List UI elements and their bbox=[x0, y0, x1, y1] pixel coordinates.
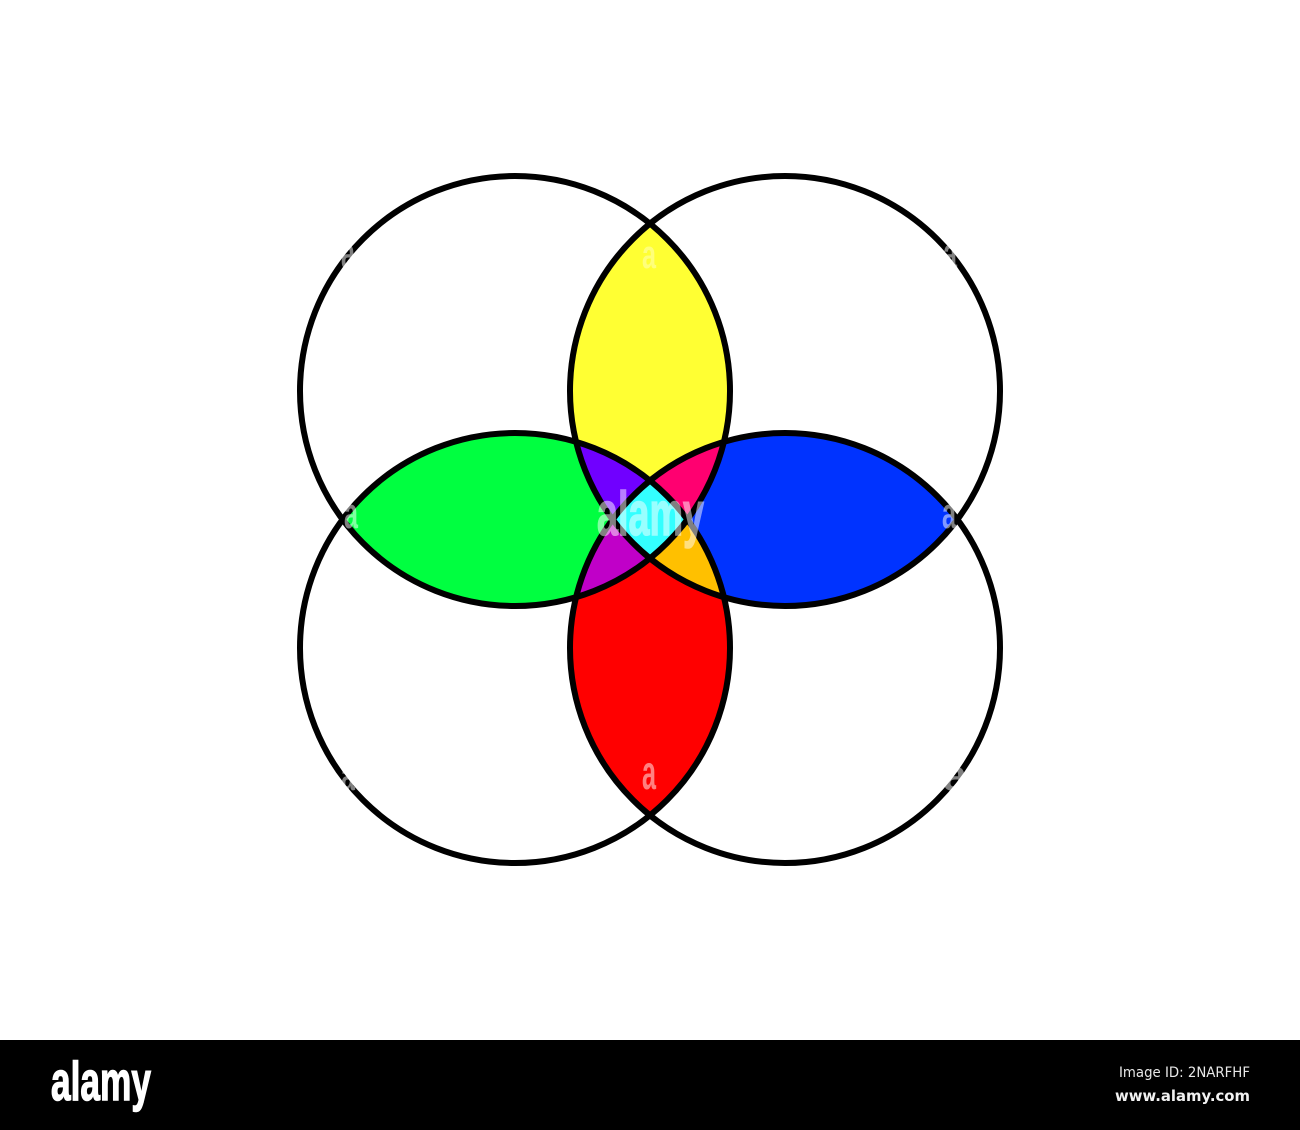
circle outlines bbox=[300, 176, 1000, 863]
website: www.alamy.com bbox=[1115, 1087, 1250, 1105]
watermark: upper right letter: a bbox=[943, 229, 957, 278]
watermark: lower right letter: a bbox=[943, 751, 968, 800]
watermark: centre logo: alamy bbox=[597, 480, 704, 549]
watermark: lower left letter: a bbox=[341, 751, 355, 800]
watermark: left letter: a bbox=[344, 489, 358, 538]
region: magenta triple overlap bbox=[576, 520, 650, 597]
footer bar bbox=[0, 1040, 1300, 1130]
watermark bbox=[341, 229, 968, 800]
region: red overlap of bottom circles bbox=[570, 558, 730, 815]
footer logo: alamy bbox=[51, 1050, 151, 1112]
watermark: top letter: a bbox=[642, 233, 656, 277]
venn diagram bbox=[300, 176, 1000, 863]
watermark: right letter: a bbox=[942, 489, 956, 538]
region: blue overlap of right circles bbox=[687, 433, 957, 606]
region: green overlap of left circles bbox=[343, 433, 613, 606]
region: violet triple overlap bbox=[576, 442, 650, 520]
region: yellow overlap of top circles bbox=[570, 224, 730, 481]
watermark: upper left letter: a bbox=[341, 229, 355, 278]
region: pink triple overlap bbox=[650, 442, 724, 520]
watermark: bottom letter: a bbox=[642, 747, 656, 800]
region: orange triple overlap bbox=[650, 520, 724, 597]
image id: Image ID: 2NARFHF bbox=[1119, 1065, 1250, 1081]
region: cyan centre overlap bbox=[613, 481, 687, 558]
